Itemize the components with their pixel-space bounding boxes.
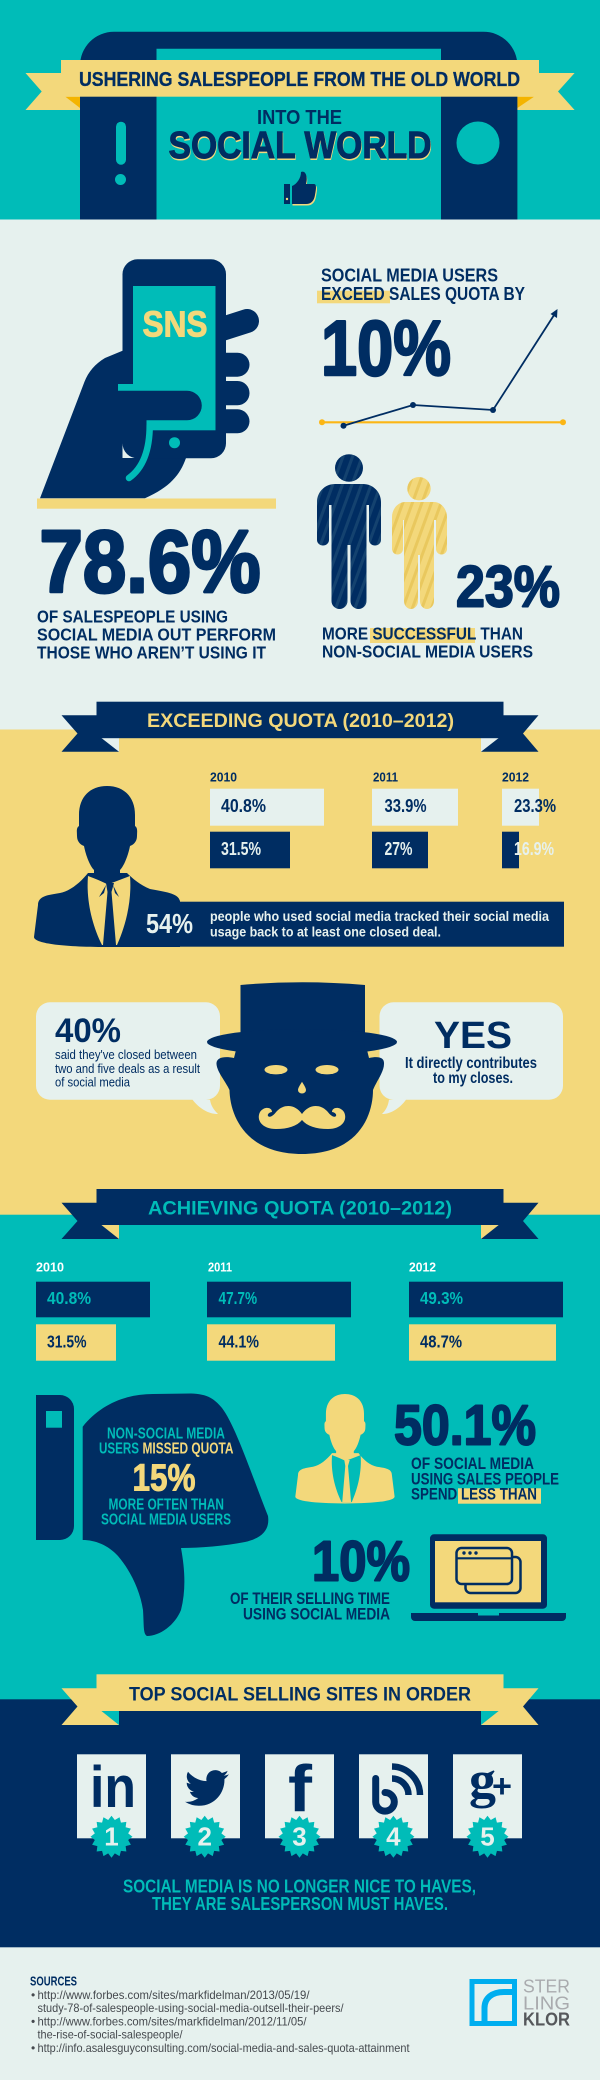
stat: exceed sales quota: 10% <box>321 304 451 392</box>
stat: 78.6%: 78.6% <box>40 512 260 611</box>
callout: 54% banner: usage back to at least one closed deal. <box>210 924 441 940</box>
stat: 10% selling time <box>230 1530 410 1623</box>
panel: top social selling sites background <box>0 1699 600 1947</box>
stat caption: OF SALESPEOPLE USING <box>37 607 228 627</box>
sources: • <box>31 2041 35 2055</box>
speech bubble: yes: to my closes. <box>433 1070 513 1087</box>
logo: sterling klor: KLOR <box>523 2009 570 2030</box>
icon: businessman silhouette <box>34 786 180 947</box>
card: linkedin: 1 <box>104 1822 119 1852</box>
icon: thumbs down with text: USERS <box>99 1440 139 1457</box>
card: facebook: 3 <box>292 1822 307 1852</box>
speech bubble: yes <box>380 1002 563 1114</box>
stat caption: THOSE WHO AREN’T USING IT <box>37 642 266 662</box>
panel: header <box>0 0 600 220</box>
year 2011: 44.1% <box>218 1332 259 1352</box>
icon: yellow businessman <box>295 1394 395 1503</box>
ribbon tails <box>26 73 575 110</box>
year 2010: 40.8% <box>47 1288 91 1308</box>
card: google plus <box>453 1752 522 1858</box>
year 2010 <box>210 770 324 868</box>
icon: yellow person <box>392 477 447 609</box>
title: social world: SOCIAL WORLD <box>169 127 432 169</box>
ribbon: exceeding quota <box>62 702 538 752</box>
panel: exceeding quota background <box>0 730 600 1215</box>
icon: palm <box>40 351 186 498</box>
sources: http://info.asalesguyconsulting.com/social-media-and-sales-quota-attainment <box>38 2041 410 2055</box>
year 2010: 31.5% <box>221 839 261 859</box>
sources: the-rise-of-social-salespeople/ <box>38 2028 183 2042</box>
sources: http://www.forbes.com/sites/markfidelman/2013/05/19/ <box>38 1988 310 2002</box>
year 2010: 2010 <box>36 1261 64 1275</box>
card: twitter <box>171 1754 240 1858</box>
year 2012 <box>409 1261 563 1361</box>
year 2011 <box>207 1261 351 1361</box>
year 2010 <box>36 1261 150 1361</box>
logo: sterling klor: STER <box>523 1976 570 1997</box>
year 2011: 2011 <box>208 1261 232 1275</box>
speech bubble: 40%: 40% <box>55 1012 121 1050</box>
speech bubble: yes: It directly contributes <box>405 1055 537 1072</box>
callout: 54% banner <box>146 902 564 947</box>
SNS label: SNS <box>142 304 208 344</box>
sources: • <box>31 2015 35 2029</box>
year 2012: 48.7% <box>420 1332 462 1352</box>
speech bubble: 40%: of social media <box>55 1075 131 1090</box>
year 2012: 16.9% <box>514 839 554 859</box>
stat: 23%: 23% <box>456 554 560 620</box>
year 2012: 2012 <box>409 1261 436 1275</box>
stat: 23%: NON-SOCIAL MEDIA USERS <box>322 642 533 662</box>
year 2012: 2012 <box>502 770 529 784</box>
title: social world: SOCIAL WORLD <box>168 125 432 167</box>
ribbon: top social selling sites: TOP SOCIAL SELLING SITES IN ORDER <box>129 1684 471 1706</box>
icon: fingers <box>210 321 250 433</box>
sources: study-78-of-salespeople-using-social-media-outsell-their-peers/ <box>38 2001 344 2015</box>
speech bubble: yes: YES <box>434 1015 512 1057</box>
stat caption: SOCIAL MEDIA OUT PERFORM <box>37 624 276 644</box>
stat: 50.1%: USING SALES PEOPLE <box>411 1470 559 1488</box>
icon: thumbs up <box>284 172 317 206</box>
icon: thumbs down with text: SOCIAL MEDIA USERS <box>101 1511 231 1528</box>
logo: sterling klor <box>472 1976 570 2030</box>
closing statement: SOCIAL MEDIA IS NO LONGER NICE TO HAVES, <box>123 1877 476 1897</box>
stat: 10% selling time: 10% <box>312 1530 410 1594</box>
callout: 54% banner: people who used social media tracked their social media <box>210 908 549 924</box>
heading: ribbon title: USHERING SALESPEOPLE FROM THE OLD WORLD <box>79 69 520 91</box>
icon: thumbs down with text: 15% <box>132 1458 196 1500</box>
year 2011: 33.9% <box>384 796 426 816</box>
stat: 50.1%: SPEND LESS THAN <box>411 1485 537 1503</box>
bar chart: achieving quota <box>36 1261 563 1361</box>
yellow base bar <box>37 498 276 509</box>
logo: sterling klor: LING <box>523 1992 570 2013</box>
icon: navy person <box>317 454 381 609</box>
stat caption <box>37 607 276 662</box>
ribbon: top social selling sites <box>62 1674 538 1725</box>
stat: 23%: MORE SUCCESSFUL THAN <box>322 623 523 643</box>
card: linkedin <box>77 1754 146 1858</box>
icon: thumbs down with text: MORE OFTEN THAN <box>108 1496 224 1513</box>
stat: 10% selling time: USING SOCIAL MEDIA <box>243 1605 390 1623</box>
sources: • <box>31 1988 35 2002</box>
panel: hand holding phone <box>37 259 276 509</box>
icon: thumbs down with text: NON-SOCIAL MEDIA <box>107 1425 225 1442</box>
year 2011: 27% <box>384 839 412 859</box>
year 2011: 2011 <box>373 770 398 784</box>
bar chart: exceeding quota <box>210 770 556 868</box>
stat: 50.1%: 50.1% <box>394 1394 536 1458</box>
stat: exceed sales quota <box>317 266 525 392</box>
panel: achieving quota background <box>0 1215 600 1700</box>
ribbon: achieving quota: ACHIEVING QUOTA (2010–2012) <box>148 1197 452 1219</box>
icon: thumbs down with text <box>36 1394 268 1636</box>
year 2012: 23.3% <box>514 796 556 816</box>
card: google plus: + <box>492 1768 512 1804</box>
stat: exceed sales quota: SOCIAL MEDIA USERS <box>321 266 498 286</box>
phone frame <box>80 32 517 220</box>
year 2012 <box>502 770 556 868</box>
stat: 50.1%: OF SOCIAL MEDIA <box>411 1455 534 1473</box>
line chart <box>319 309 566 429</box>
ribbon: exceeding quota: EXCEEDING QUOTA (2010–2012) <box>147 710 454 732</box>
closing statement <box>123 1877 476 1914</box>
icon: man with top hat and moustache <box>207 982 397 1154</box>
icon: phone speaker <box>115 122 126 185</box>
sources <box>30 1975 410 2055</box>
stat: 50.1% <box>394 1394 559 1504</box>
year 2010: 2010 <box>210 770 237 784</box>
heading: into the: INTO THE <box>257 106 342 129</box>
icon: laptop with browser windows <box>411 1534 566 1621</box>
card: facebook <box>265 1752 334 1858</box>
stat: 78.6% <box>37 512 276 662</box>
speech bubble: 40% <box>36 1002 220 1114</box>
phone home button <box>169 437 180 448</box>
sources: SOURCES <box>30 1975 77 1989</box>
closing statement: THEY ARE SALESPERSON MUST HAVES. <box>152 1894 448 1914</box>
year 2012: 49.3% <box>420 1288 463 1308</box>
stat: 10% selling time: OF THEIR SELLING TIME <box>230 1590 390 1608</box>
card: blog feed <box>359 1754 428 1858</box>
ribbon band <box>61 60 539 97</box>
sources: http://www.forbes.com/sites/markfidelman/2012/11/05/ <box>38 2015 307 2029</box>
year 2010: 31.5% <box>47 1332 87 1352</box>
card: google plus: 5 <box>480 1822 495 1852</box>
stat: exceed sales quota: EXCEED SALES QUOTA BY <box>321 284 525 304</box>
year 2011: 47.7% <box>218 1288 257 1308</box>
phone screen <box>133 286 216 430</box>
card: blog feed: 4 <box>386 1822 401 1852</box>
callout: 54% banner: 54% <box>146 908 193 939</box>
year 2010: 40.8% <box>221 796 266 816</box>
thumb <box>118 384 202 478</box>
card: google plus: g <box>469 1752 496 1809</box>
speech bubble: 40%: said they've closed between <box>55 1047 197 1062</box>
icon: phone button <box>456 122 500 164</box>
icon: phone <box>122 259 226 458</box>
icon: thumbs down with text: MISSED QUOTA <box>142 1440 234 1457</box>
card: facebook: f <box>288 1752 313 1826</box>
card: twitter: 2 <box>197 1822 212 1852</box>
stat: 23% <box>322 554 560 662</box>
year 2011 <box>372 770 458 868</box>
card: linkedin: in <box>90 1755 136 1820</box>
speech bubble: 40%: two and five deals as a result <box>55 1061 200 1076</box>
ribbon: achieving quota <box>62 1189 538 1239</box>
